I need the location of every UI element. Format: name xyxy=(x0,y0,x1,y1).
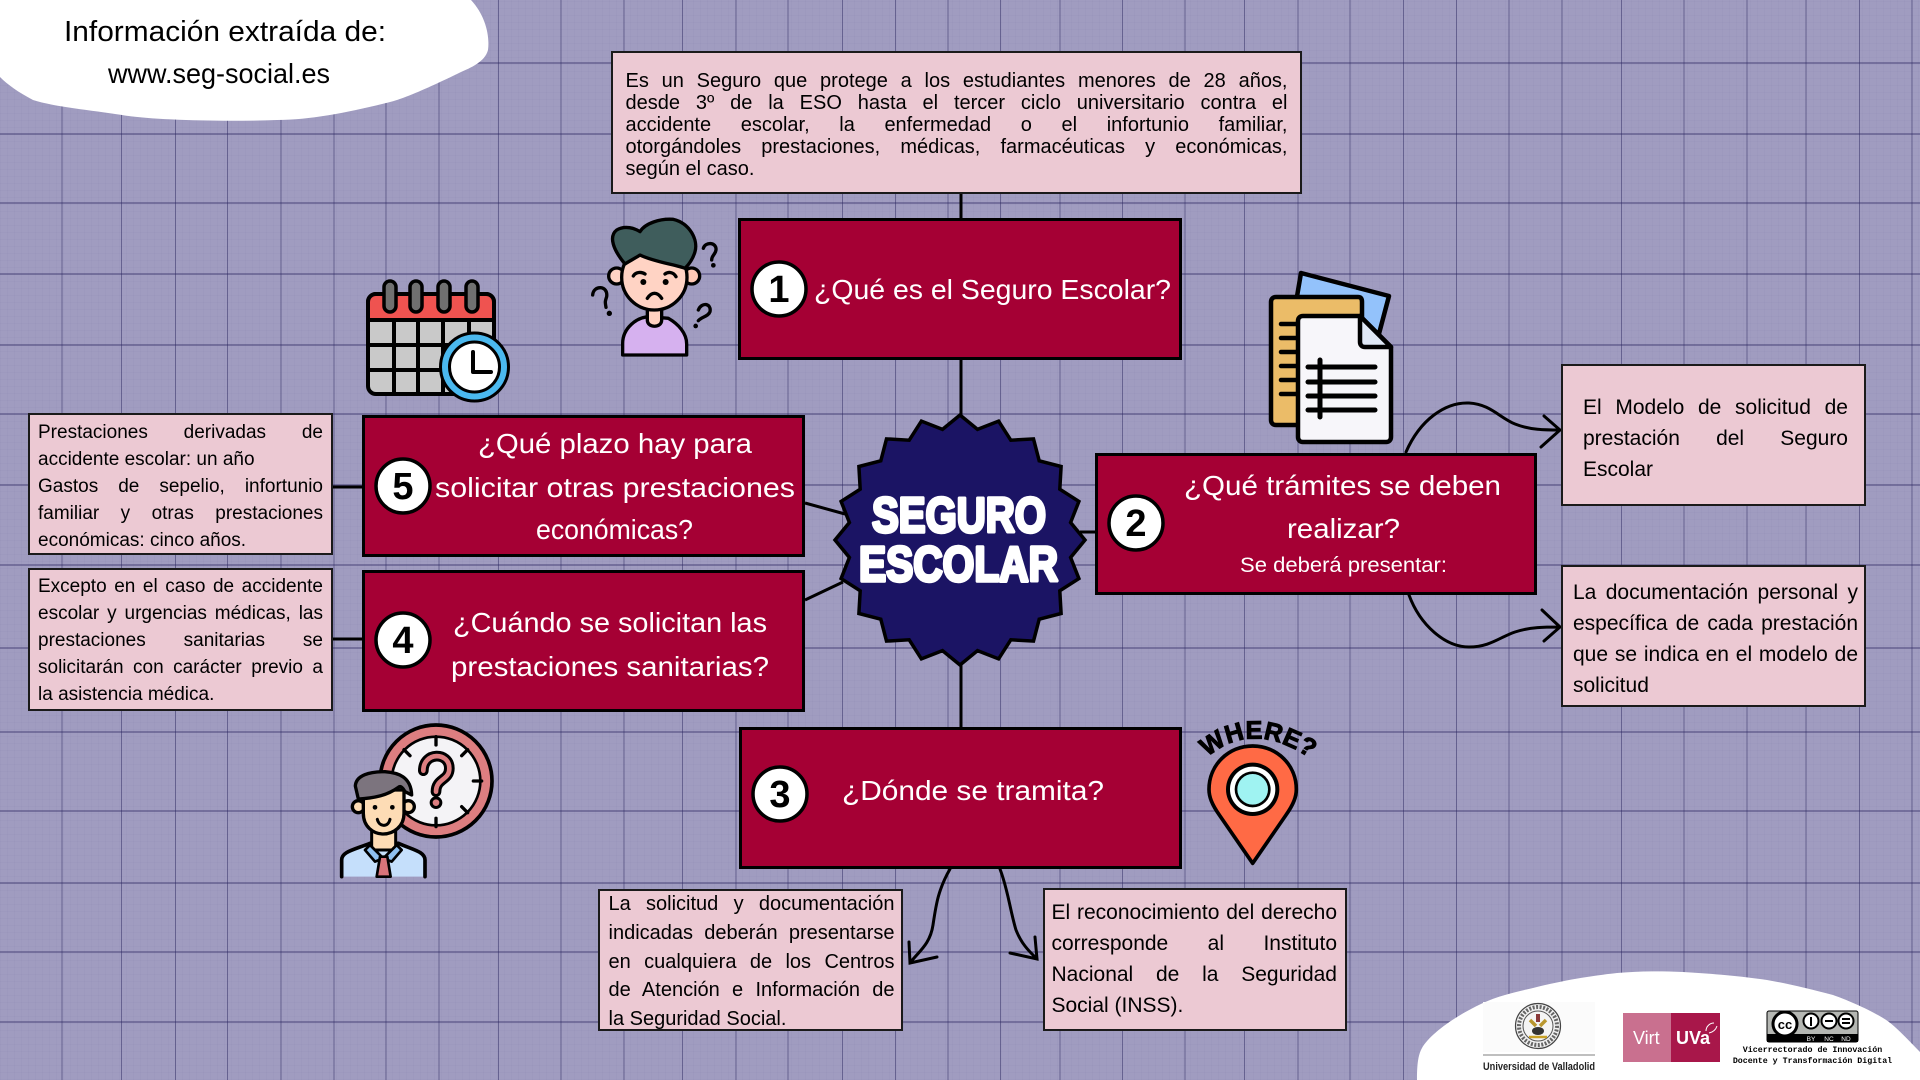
panel: question 3 xyxy=(739,727,1182,869)
panel: model form xyxy=(1561,364,1866,506)
documentation text: específica de cada prestación xyxy=(1573,612,1858,634)
deadlines text xyxy=(38,422,323,550)
INSS text xyxy=(1052,900,1337,1016)
central badge: Seguro Escolar: SEGURO xyxy=(872,489,1046,543)
icon: map pin with WHERE xyxy=(1196,720,1317,866)
INSS text: Social (INSS). xyxy=(1052,994,1183,1016)
logo: VirtUVa: Virt xyxy=(1633,1028,1660,1048)
documentation text: solicitud xyxy=(1573,674,1649,696)
heading 3: 3 xyxy=(769,774,791,816)
health benefits text: la asistencia médica. xyxy=(38,684,214,705)
documentation text xyxy=(1573,580,1858,696)
panel: question 5 xyxy=(362,415,805,557)
where to submit text xyxy=(608,893,894,1030)
definition text xyxy=(626,70,1288,180)
model form text xyxy=(1583,396,1848,480)
logo: Creative Commons licence: cc xyxy=(1778,1017,1792,1032)
deadlines text: Gastos de sepelio, infortunio xyxy=(38,476,323,496)
where to submit text: La solicitud y documentación xyxy=(608,893,894,915)
health benefits text xyxy=(38,576,323,705)
credit text: Vicerrectorado de Innovación xyxy=(1743,1045,1882,1055)
where to submit text: en cualquiera de los Centros xyxy=(608,951,894,973)
health benefits text: solicitarán con carácter previo a xyxy=(38,657,323,678)
heading 3 xyxy=(753,767,1104,821)
heading 4: 4 xyxy=(392,620,414,662)
heading 2: ¿Qué trámites se deben xyxy=(1184,470,1501,501)
heading 5: económicas? xyxy=(536,514,693,545)
definition text: Es un Seguro que protege a los estudiantes menores de 28 años, xyxy=(626,70,1288,92)
definition text: accidente escolar, la enfermedad o el infortunio familiar, xyxy=(626,114,1288,136)
model form text: El Modelo de solicitud de xyxy=(1583,396,1848,418)
deadlines text: familiar y otras prestaciones xyxy=(38,502,323,524)
logo: Creative Commons licence: BY xyxy=(1807,1036,1816,1043)
model form text: Escolar xyxy=(1583,458,1653,480)
panel: health benefits timing xyxy=(28,568,333,711)
credit text xyxy=(1733,1045,1892,1066)
logo: Universidad de Valladolid xyxy=(1483,1002,1595,1073)
icon: confused student xyxy=(591,218,718,357)
logo: Creative Commons licence: NC xyxy=(1824,1036,1834,1043)
heading 5: ¿Qué plazo hay para xyxy=(478,428,752,459)
where to submit text: indicadas deberán presentarse xyxy=(608,922,894,944)
logo: Creative Commons licence: ND xyxy=(1841,1036,1851,1043)
heading 3: ¿Dónde se tramita? xyxy=(842,775,1104,806)
model form text: prestación del Seguro xyxy=(1583,426,1848,450)
panel: INSS xyxy=(1043,888,1347,1031)
panel: deadlines xyxy=(28,413,333,555)
logo: Creative Commons licence xyxy=(1767,1011,1858,1043)
where to submit text: la Seguridad Social. xyxy=(608,1008,786,1030)
heading 1: 1 xyxy=(768,269,790,311)
INSS text: corresponde al Instituto xyxy=(1052,932,1337,954)
where to submit text: de Atención e Información de xyxy=(608,979,894,1001)
deadlines text: accidente escolar: un año xyxy=(38,448,255,470)
heading 4 xyxy=(376,607,769,682)
logo: Universidad de Valladolid: Universidad de Valladolid xyxy=(1483,1061,1595,1073)
heading 2: 2 xyxy=(1125,503,1147,545)
heading 5: solicitar otras prestaciones xyxy=(435,472,795,503)
logo: VirtUVa xyxy=(1623,1013,1720,1062)
panel: question 1 xyxy=(738,218,1182,360)
central badge: Seguro Escolar: ESCOLAR xyxy=(859,538,1058,592)
deadlines text: económicas: cinco años. xyxy=(38,530,246,550)
heading 4: ¿Cuándo se solicitan las xyxy=(453,607,767,638)
icon: map pin with WHERE: WHERE? xyxy=(1196,720,1317,756)
health benefits text: Excepto en el caso de accidente xyxy=(38,576,323,597)
heading 2: realizar? xyxy=(1287,513,1400,544)
INSS text: El reconocimiento del derecho xyxy=(1052,900,1337,924)
heading 4: prestaciones sanitarias? xyxy=(451,651,769,682)
heading 5 xyxy=(376,428,795,545)
deadlines text: Prestaciones derivadas de xyxy=(38,422,323,442)
definition text: desde 3º de la ESO hasta el tercer ciclo universitario contra el xyxy=(626,92,1288,114)
definition text: otorgándoles prestaciones, médicas, farmacéuticas y económicas, xyxy=(626,136,1288,158)
heading 2 xyxy=(1109,470,1501,577)
documentation text: La documentación personal y xyxy=(1573,580,1858,604)
panel: where to submit xyxy=(598,889,903,1031)
panel: question 4 xyxy=(362,570,805,712)
health benefits text: escolar y urgencias médicas, las xyxy=(38,603,323,624)
health benefits text: prestaciones sanitarias se xyxy=(38,630,323,651)
heading 2: Se deberá presentar: xyxy=(1240,554,1447,577)
credit text: Docente y Transformación Digital xyxy=(1733,1056,1892,1066)
heading 1: ¿Qué es el Seguro Escolar? xyxy=(814,274,1171,305)
documentation text: que se indica en el modelo de xyxy=(1573,642,1858,666)
logo: VirtUVa: UVa xyxy=(1676,1028,1711,1048)
definition text: según el caso. xyxy=(626,158,754,180)
panel: question 2 xyxy=(1095,453,1537,595)
panel: definition xyxy=(610,51,1302,194)
source bubble: www.seg-social.es xyxy=(107,58,330,89)
INSS text: Nacional de la Seguridad xyxy=(1052,962,1337,986)
icon: man with question clock xyxy=(340,723,494,878)
heading 5: 5 xyxy=(392,466,414,508)
panel: documentation xyxy=(1561,565,1866,707)
heading 1 xyxy=(752,262,1171,316)
source bubble: Información extraída de: xyxy=(64,16,386,48)
